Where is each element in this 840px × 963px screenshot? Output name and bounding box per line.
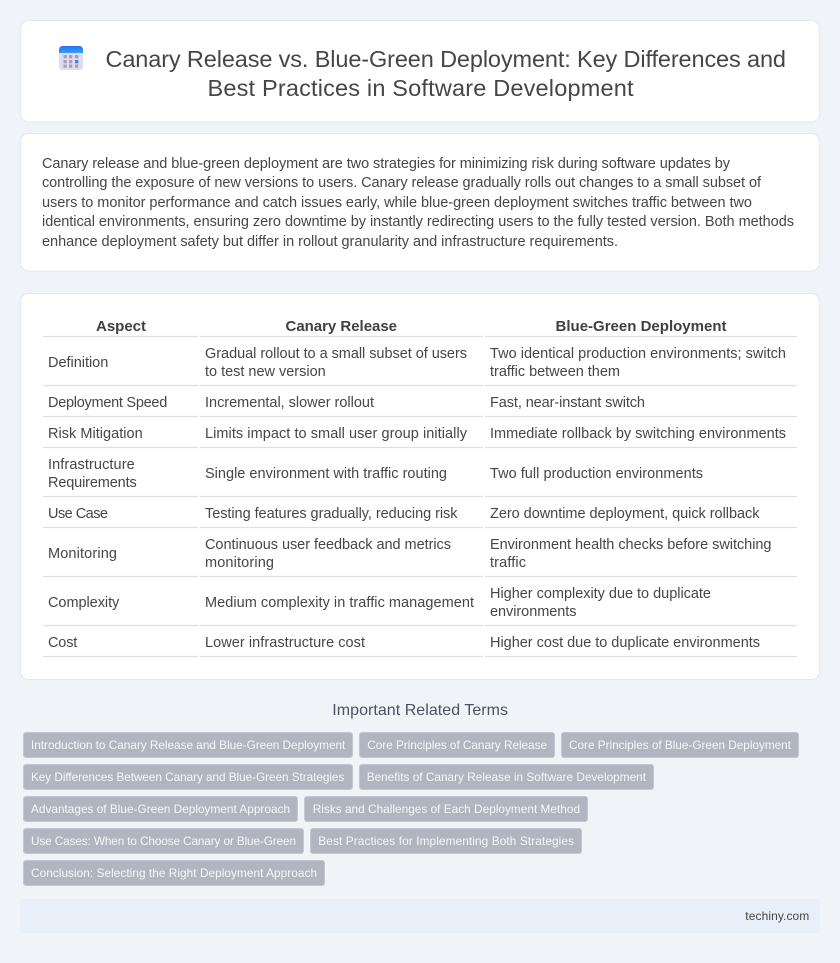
panel: comparison table [20, 294, 820, 680]
table header row: Aspect [96, 318, 146, 335]
table header row: Canary Release [286, 318, 397, 335]
tag: Use Cases: When to Choose Canary or Blue-Green [31, 834, 296, 848]
related terms tags [24, 732, 798, 886]
intro paragraph [42, 156, 794, 250]
tag [24, 828, 304, 854]
row: cost: Lower infrastructure cost [205, 635, 365, 651]
row: risk mitigation: Immediate rollback by switching environments [490, 426, 786, 442]
row: risk mitigation: Limits impact to small user group initially [205, 426, 468, 442]
row: deployment speed: Deployment Speed [48, 395, 167, 411]
intro paragraph: Canary release and blue-green deployment are two strategies for minimizing risk during software updates by [42, 156, 731, 172]
tag: Core Principles of Blue-Green Deployment [569, 738, 792, 752]
tag [360, 764, 654, 790]
panel: header [20, 20, 820, 122]
tag: Key Differences Between Canary and Blue-Green Strategies [31, 770, 344, 784]
row: use case: Use Case [48, 506, 108, 522]
tag [24, 732, 352, 758]
row: complexity [43, 586, 797, 626]
row: cost: Higher cost due to duplicate environments [490, 635, 760, 651]
title: Best Practices in Software Development [208, 75, 634, 101]
row: definition: Gradual rollout to a small subset of users [205, 346, 467, 362]
tag: Benefits of Canary Release in Software Development [367, 770, 647, 784]
tag [360, 732, 554, 758]
row: infrastructure requirements: Two full production environments [490, 466, 703, 482]
row: definition: Two identical production environments; switch [490, 346, 786, 362]
intro paragraph: enhance deployment safety but differ in rollout granularity and infrastructure requirements. [42, 234, 618, 250]
row: deployment speed: Fast, near-instant switch [490, 395, 645, 411]
tag: Advantages of Blue-Green Deployment Approach [31, 802, 290, 816]
heading: important related terms: Important Related Terms [332, 702, 508, 719]
tag [310, 828, 582, 854]
footer [20, 899, 820, 933]
title: Canary Release vs. Blue-Green Deployment: Key Differences and [106, 46, 786, 72]
row: complexity: environments [490, 604, 576, 620]
row: monitoring: Monitoring [48, 546, 117, 562]
row: cost [43, 635, 797, 656]
row: monitoring: traffic [490, 555, 526, 571]
row: deployment speed: Incremental, slower rollout [205, 395, 374, 411]
table header row: Blue-Green Deployment [556, 318, 726, 335]
row: use case: Testing features gradually, reducing risk [205, 506, 458, 522]
row: definition: Definition [48, 355, 108, 371]
row: complexity: Higher complexity due to duplicate [490, 586, 711, 602]
title [106, 46, 786, 101]
tag: Introduction to Canary Release and Blue-Green Deployment [31, 738, 346, 752]
row: risk mitigation: Risk Mitigation [48, 426, 143, 442]
tag [304, 796, 588, 822]
panel: intro text [20, 134, 820, 271]
tag: Conclusion: Selecting the Right Deployment Approach [31, 866, 317, 880]
row: infrastructure requirements: Infrastructure [48, 457, 135, 473]
icon: calendar [59, 46, 83, 70]
tag [24, 764, 352, 790]
tag: Risks and Challenges of Each Deployment Method [313, 802, 580, 816]
tag [562, 732, 798, 758]
row: monitoring [43, 537, 797, 576]
tag: Best Practices for Implementing Both Strategies [318, 834, 574, 848]
tag: Core Principles of Canary Release [367, 738, 547, 752]
row: infrastructure requirements: Single environment with traffic routing [205, 466, 447, 482]
row: infrastructure requirements: Requirements [48, 475, 137, 491]
row: cost: Cost [48, 635, 77, 651]
row: use case [43, 506, 797, 528]
row: risk mitigation [43, 426, 797, 448]
row: monitoring: Continuous user feedback and metrics [205, 537, 451, 553]
row: monitoring: Environment health checks before switching [490, 537, 772, 553]
row: complexity: Complexity [48, 595, 120, 611]
row: definition [43, 346, 797, 386]
intro paragraph: users to monitor performance and catch issues early, while blue-green deployment switches traffic between two [42, 195, 752, 211]
row: deployment speed [43, 395, 797, 416]
row: monitoring: monitoring [205, 555, 274, 571]
tag [24, 796, 298, 822]
intro paragraph: controlling the exposure of new versions to users. Canary release gradually rolls out changes to a small subset of [42, 175, 762, 191]
row: infrastructure requirements [43, 457, 797, 496]
row: complexity: Medium complexity in traffic management [205, 595, 474, 611]
row: definition: traffic between them [490, 364, 620, 380]
row: use case: Zero downtime deployment, quick rollback [490, 506, 760, 522]
tag [24, 860, 324, 886]
intro paragraph: identical environments, ensuring zero downtime by instantly redirecting users to the fully tested version. Both methods [42, 214, 794, 230]
table header row [43, 318, 797, 336]
row: definition: to test new version [205, 364, 326, 380]
footer source text: techiny.com [745, 909, 809, 923]
